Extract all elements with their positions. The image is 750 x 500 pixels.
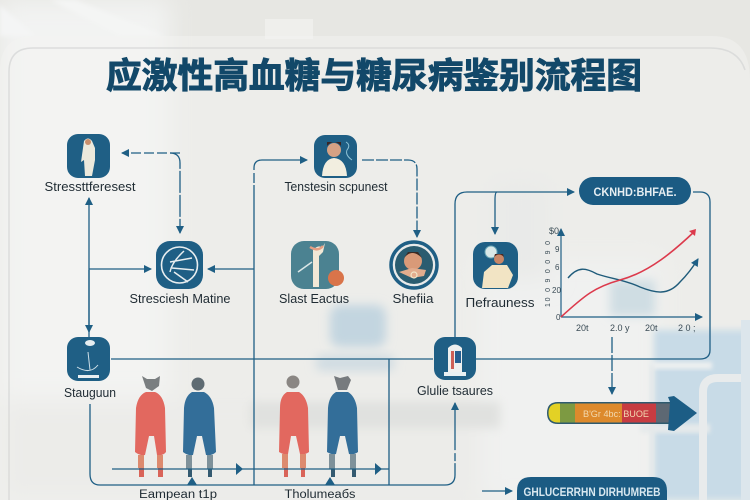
figure: red patient 1: [135, 376, 166, 477]
line chart: 9: [555, 245, 560, 254]
label: staugun: Stauguun: [64, 386, 116, 400]
line chart: 2.0 y: [610, 323, 630, 333]
label: shelia: Shefiia: [392, 292, 434, 306]
icon: stress factors: [291, 241, 344, 289]
figure: blue patient 2: [327, 376, 358, 477]
icon: circular nerve: [156, 241, 203, 289]
label: refrauness: Πefrauness: [466, 296, 534, 310]
pill: bottom header: GHLUCERRHN DIRHUMREB: [524, 487, 660, 499]
line chart: $0: [549, 226, 559, 236]
pill: bottom header: [517, 477, 667, 500]
line chart: 20: [552, 286, 561, 295]
title: 应激性高血糖与糖尿病鉴别流程图: [106, 57, 642, 96]
line chart: 6: [555, 263, 560, 272]
connector arrows: [89, 153, 710, 491]
label: tension response: Tenstesin scpunest: [284, 180, 388, 194]
icon: doctor portrait: [314, 135, 357, 178]
pill: top header: [579, 177, 691, 205]
label: stress test: Stressttferesest: [44, 180, 136, 194]
icon: stress person: [67, 134, 110, 178]
icon: lab device: [434, 337, 476, 380]
severity arrow bar: [547, 396, 697, 431]
label: glulie tauaes: Glulie tsaures: [417, 384, 493, 398]
background: blurred room objects seen through panel: [250, 280, 750, 500]
severity arrow bar: B'Gr 4bc: BUOE: [583, 409, 649, 419]
line chart: 10 0 9 0 0 9 0: [545, 241, 552, 307]
label: stress machine: Stresciesh Matine: [130, 292, 231, 306]
icon: stagnation: [67, 337, 110, 381]
label: stress factors: Slast Eactus: [279, 292, 349, 306]
line chart: 20t: [576, 323, 589, 333]
timeline arrows over figures: [112, 463, 389, 485]
icon: round face: [391, 242, 437, 288]
line chart: 0: [556, 313, 561, 322]
pill: top header: CKNHD:BHFAE.: [594, 185, 676, 199]
figure: red patient 2: [279, 376, 309, 477]
line chart: 20t: [645, 323, 658, 333]
icon: woman with clock: [473, 242, 518, 289]
line chart: [545, 226, 702, 333]
figure: blue patient 1: [183, 378, 216, 477]
line chart: 2 0 ;: [678, 323, 696, 333]
